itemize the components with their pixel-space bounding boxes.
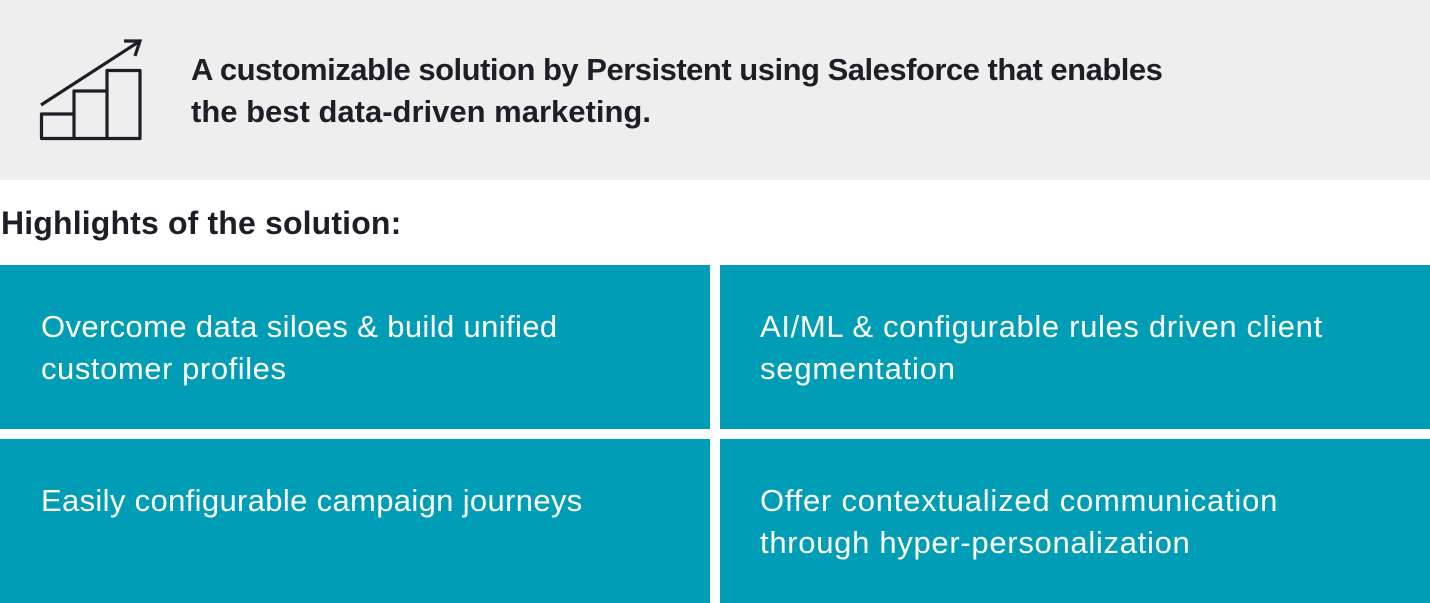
panel text: AI/ML & configurable rules driven client [760, 309, 1323, 344]
header band [0, 0, 1430, 180]
panel text: through hyper-personalization [760, 525, 1190, 560]
panel text: Easily configurable campaign journeys [41, 483, 583, 518]
panel text: Overcome data siloes & build unified [41, 309, 557, 344]
headline: A customizable solution by Persistent using Salesforce that enables [191, 52, 1162, 87]
headline: the best data-driven marketing. [191, 94, 651, 129]
panel: campaign journeys [0, 439, 710, 603]
panel: communication [720, 439, 1430, 603]
headline [191, 52, 1162, 129]
panel: data siloes [0, 265, 710, 429]
panel text: customer profiles [41, 351, 287, 386]
icon: rising bar chart with arrow [40, 39, 142, 140]
section heading: Highlights of the solution: [1, 205, 401, 241]
panel text: Offer contextualized communication [760, 483, 1278, 518]
panel text [41, 309, 557, 386]
panel text [760, 309, 1323, 386]
panel text [760, 483, 1278, 560]
panel: segmentation [720, 265, 1430, 429]
panel text: segmentation [760, 351, 956, 386]
